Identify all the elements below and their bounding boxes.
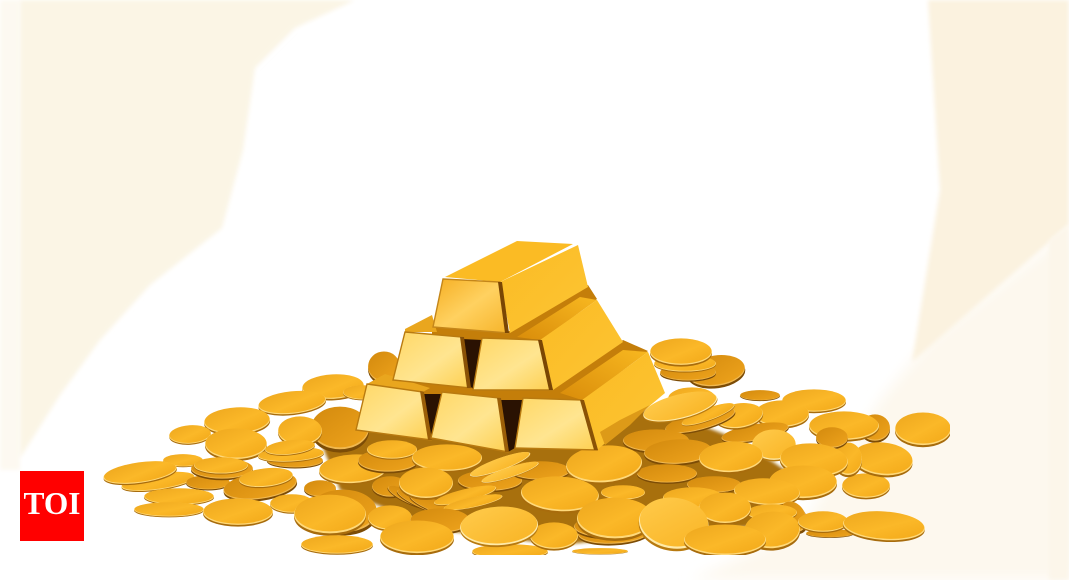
shaded backing of the pile bbox=[320, 410, 800, 545]
TOI logo bbox=[20, 471, 84, 541]
TOI logo: TOI bbox=[24, 485, 80, 521]
coin pile bbox=[102, 338, 951, 559]
bar: middle left bbox=[393, 315, 471, 388]
bar: bottom left bbox=[356, 374, 432, 440]
bar: bottom middle bbox=[431, 392, 509, 452]
bar: top bbox=[433, 241, 588, 333]
shaded seams between bars bbox=[367, 285, 648, 402]
stacked gold bars bbox=[356, 241, 665, 452]
shadow gaps between bars bbox=[423, 337, 523, 452]
bar: middle right bbox=[473, 297, 623, 390]
bar: bottom right bbox=[515, 350, 665, 450]
